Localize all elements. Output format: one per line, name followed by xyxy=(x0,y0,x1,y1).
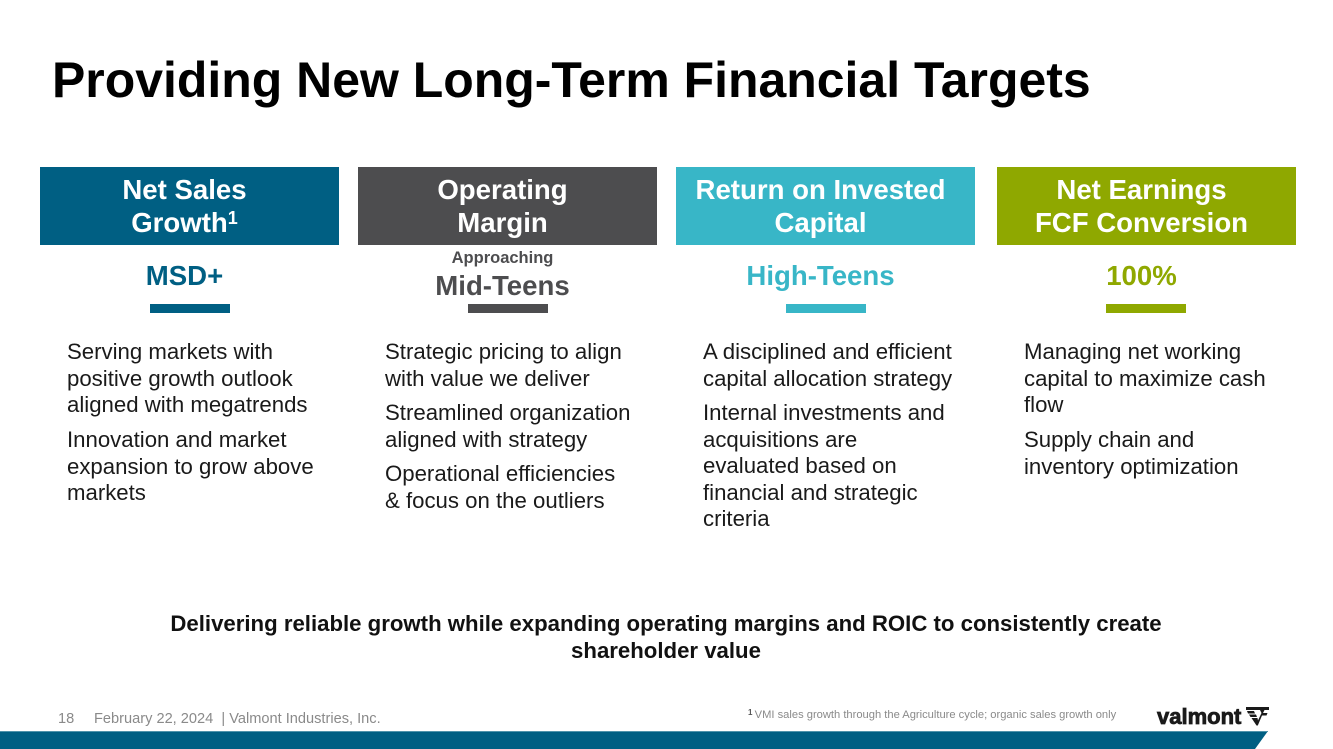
text block: operating margin points: Strategic pricing to align xyxy=(385,339,622,364)
heading: net earnings FCF conversion: FCF Conversion xyxy=(1035,207,1248,238)
accent bar xyxy=(786,304,866,313)
panel: net sales growth: expansion to grow above xyxy=(67,454,314,478)
accent bar xyxy=(1106,304,1186,313)
target label: approaching: Approaching xyxy=(452,249,553,267)
heading: net earnings FCF conversion xyxy=(997,167,1296,245)
page number: 18 xyxy=(58,711,74,727)
text block: ROIC points xyxy=(703,339,952,531)
heading: net sales growth xyxy=(40,167,339,245)
text block: ROIC points: capital allocation strategy xyxy=(703,366,952,390)
footer band xyxy=(0,731,1268,749)
heading: return on invested capital: Capital xyxy=(774,207,866,238)
text block: net sales points: Serving markets with xyxy=(67,339,273,364)
panel: net earnings FCF conversion: Supply chain and xyxy=(1024,427,1194,452)
heading: return on invested capital: Return on Invested xyxy=(696,174,945,205)
accent bar xyxy=(150,304,230,313)
panel: operating margin: aligned with strategy xyxy=(385,426,587,452)
heading: net earnings FCF conversion: Net Earnings xyxy=(1056,174,1227,205)
text block: operating margin points xyxy=(385,339,630,512)
icon: valmont V mark xyxy=(1246,707,1269,726)
text block: ROIC points: A disciplined and efficient xyxy=(703,339,952,364)
text block: net sales points: aligned with megatrends xyxy=(67,392,308,417)
callout: summary statement xyxy=(170,611,1162,663)
accent bar xyxy=(468,304,548,313)
panel: net sales growth: markets xyxy=(67,480,146,505)
heading: operating margin xyxy=(358,167,657,245)
footer date and company: February 22, 2024 | Valmont Industries, Inc. xyxy=(94,711,381,727)
panel: return on invested capital: Internal investments and xyxy=(703,400,945,425)
heading: operating margin: Operating xyxy=(437,174,568,205)
panel: operating margin: Operational efficiencies xyxy=(385,461,615,486)
panel: operating margin xyxy=(358,167,657,512)
callout: summary statement: Delivering reliable growth while expanding operating margins and ROIC to consistently create xyxy=(170,611,1162,636)
panel: net sales growth: Innovation and market xyxy=(67,427,287,452)
panel: return on invested capital: acquisitions are xyxy=(703,426,857,452)
panel: return on invested capital: evaluated based on xyxy=(703,453,897,478)
target value: mid-teens: Mid-Teens xyxy=(435,270,570,301)
text block: FCF points: flow xyxy=(1024,392,1063,417)
panel: net earnings FCF conversion: inventory optimization xyxy=(1024,454,1239,478)
heading: operating margin: Margin xyxy=(457,207,548,238)
heading: net sales growth: Growth1 xyxy=(131,207,238,238)
title: Providing New Long-Term Financial Targets xyxy=(52,52,1091,108)
text block: FCF points: Managing net working xyxy=(1024,339,1241,364)
footnote: 1 VMI sales growth through the Agriculture cycle; organic sales growth only xyxy=(748,708,1116,721)
text block: net sales points xyxy=(67,339,314,505)
target value: MSD+: MSD+ xyxy=(146,260,223,291)
target value: high-teens: High-Teens xyxy=(746,260,895,291)
logo: valmont xyxy=(1156,704,1269,729)
logo wordmark: valmont xyxy=(1157,704,1241,729)
panel: net sales growth xyxy=(40,167,339,505)
panel: operating margin: & focus on the outliers xyxy=(385,488,605,512)
panel: return on invested capital xyxy=(676,167,975,531)
heading: net sales growth: Net Sales xyxy=(122,174,247,205)
text block: net sales points: positive growth outlook xyxy=(67,366,293,390)
text block: FCF points: capital to maximize cash xyxy=(1024,366,1266,390)
panel: operating margin: Streamlined organization xyxy=(385,400,630,425)
panel: return on invested capital: financial and strategic xyxy=(703,480,918,504)
text block: operating margin points: with value we deliver xyxy=(385,366,590,390)
target value: 100%: 100% xyxy=(1106,260,1177,291)
panel: net earnings FCF conversion xyxy=(997,167,1296,478)
panel: return on invested capital: criteria xyxy=(703,506,770,531)
heading: return on invested capital xyxy=(676,167,975,245)
text block: FCF points xyxy=(1024,339,1266,478)
callout: summary statement: shareholder value xyxy=(571,638,761,663)
